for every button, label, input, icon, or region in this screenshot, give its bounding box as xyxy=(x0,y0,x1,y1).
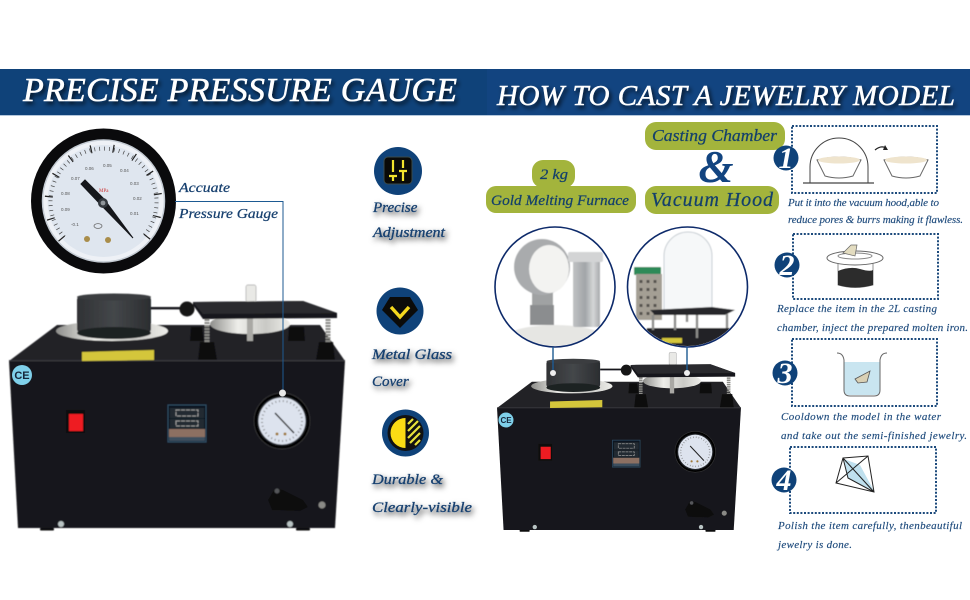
icon: half circle xyxy=(382,410,429,456)
step 2 text: Replace the item in the 2L casting xyxy=(776,303,938,315)
step 1 illustration xyxy=(803,138,928,183)
large pressure gauge xyxy=(31,128,176,274)
step 3 number: 3 xyxy=(776,357,792,390)
large pressure gauge: 0.08 xyxy=(61,191,70,196)
badge: casting chamber xyxy=(645,122,785,150)
icon: chevron shield xyxy=(376,288,424,334)
step 1 text: Put it into the vacuum hood,able to xyxy=(787,197,940,209)
step 4 number xyxy=(772,464,796,497)
feature: durable and clearly-visible: Clearly-visible xyxy=(372,500,472,516)
label: accurate pressure gauge: Accuate xyxy=(178,181,230,196)
badge: vacuum hood: Vacuum Hood xyxy=(651,189,774,211)
step 3 text: Cooldown the model in the water xyxy=(781,411,942,423)
step 1 text: reduce pores & burrs making it flawless. xyxy=(788,214,963,226)
step 2 xyxy=(774,234,968,334)
machine: left xyxy=(9,285,345,530)
icon: CE mark right xyxy=(498,412,514,428)
step 3 number xyxy=(772,357,798,390)
icon: CE mark left: CE xyxy=(14,370,30,382)
step 2 number: 2 xyxy=(778,249,794,282)
step 1 box xyxy=(792,126,937,193)
step 2 text xyxy=(776,303,968,334)
step 2 illustration xyxy=(827,245,883,288)
step 3 illustration xyxy=(837,353,887,396)
banner: left xyxy=(0,69,490,115)
feature: precise adjustment: Adjustment xyxy=(372,225,446,241)
step 4 illustration xyxy=(836,456,874,492)
large pressure gauge: 0.02 xyxy=(133,196,142,201)
step 3 box xyxy=(792,339,937,406)
detail circle: gold melting furnace xyxy=(495,227,615,347)
step 4 box xyxy=(790,447,936,513)
step 1 number xyxy=(774,142,798,175)
title: how to cast a jewelry model: HOW TO CAST A JEWELRY MODEL xyxy=(496,80,955,112)
badge: 2 kg gold melting furnace: 2 kg xyxy=(540,167,569,183)
step 4 text: jewelry is done. xyxy=(776,539,852,551)
large pressure gauge: 0.07 xyxy=(71,176,80,181)
step 4 xyxy=(772,447,962,551)
large pressure gauge: 0.05 xyxy=(103,163,112,168)
step 3 text xyxy=(781,411,967,442)
large pressure gauge: 0.04 xyxy=(120,168,129,173)
step 4 text xyxy=(776,520,962,551)
callout line: gauge xyxy=(175,202,286,396)
large pressure gauge: 0.01 xyxy=(130,211,139,216)
icon: CE mark left xyxy=(12,365,32,385)
step 3 text: and take out the semi-finished jewelry. xyxy=(781,430,967,442)
machine: right xyxy=(497,353,741,532)
badge: 2 kg gold melting furnace xyxy=(486,160,636,213)
step 4 text: Polish the item carefully, thenbeautiful xyxy=(777,520,962,532)
detail circle: casting chamber and vacuum hood xyxy=(627,227,750,350)
icon: sliders xyxy=(374,147,422,195)
feature: precise adjustment: Precise xyxy=(372,200,418,216)
large pressure gauge: 0.03 xyxy=(130,181,139,186)
feature: precise adjustment xyxy=(372,147,446,241)
banner: right xyxy=(487,69,970,115)
large pressure gauge: 0.09 xyxy=(61,207,70,212)
step 1 number: 1 xyxy=(778,142,794,175)
ampersand: & xyxy=(698,142,734,192)
feature: durable and clearly-visible xyxy=(371,410,472,516)
feature: metal glass cover xyxy=(371,288,452,390)
feature: metal glass cover: Cover xyxy=(372,374,409,390)
feature: metal glass cover: Metal Glass xyxy=(371,347,452,363)
step 2 box xyxy=(793,234,938,299)
badge: 2 kg gold melting furnace: Gold Melting Furnace xyxy=(491,193,629,209)
icon: CE mark right: CE xyxy=(500,416,512,425)
step 2 text: chamber, inject the prepared molten iron. xyxy=(777,322,968,334)
step 1 text xyxy=(787,197,963,226)
label: accurate pressure gauge: Pressure Gauge xyxy=(178,207,278,222)
title: precise pressure gauge: PRECISE PRESSURE GAUGE xyxy=(22,72,457,109)
large pressure gauge: MPa xyxy=(99,189,109,194)
large pressure gauge: -0.1 xyxy=(71,222,79,227)
step 2 number xyxy=(774,249,800,282)
label: accurate pressure gauge xyxy=(178,181,278,222)
step 4 number: 4 xyxy=(776,464,792,497)
feature: durable and clearly-visible: Durable & xyxy=(371,472,443,488)
step 3 xyxy=(772,339,967,442)
large pressure gauge: 0.06 xyxy=(85,166,94,171)
badge: casting chamber: Casting Chamber xyxy=(652,126,777,145)
callout lines: right machine xyxy=(550,347,690,376)
step 1 xyxy=(774,126,963,226)
